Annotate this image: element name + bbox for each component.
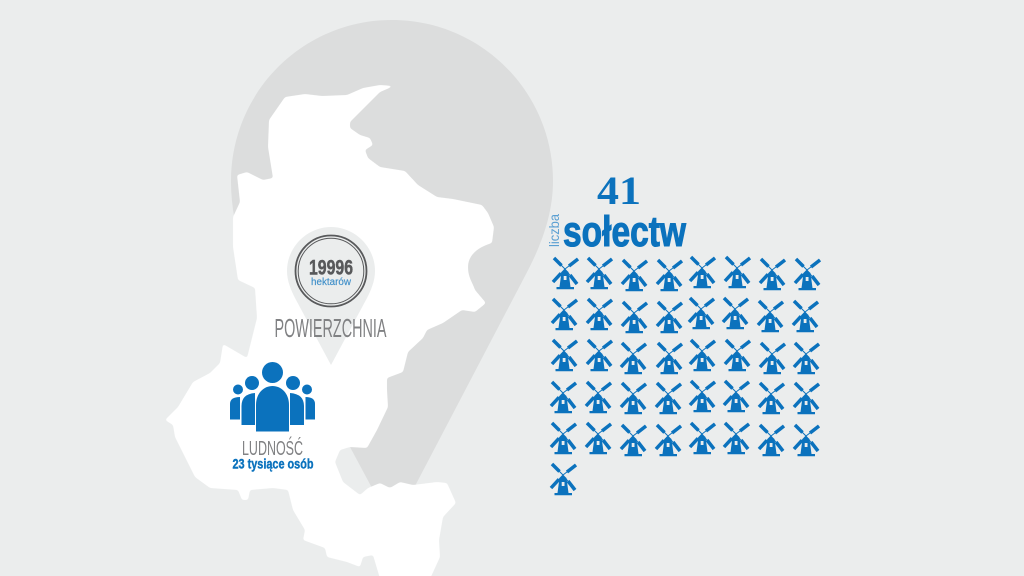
area unit: hektarów [311,277,352,288]
heading: area: POWIERZCHNIA [274,313,387,343]
map of the municipality [165,85,494,576]
icon: group of people [230,362,315,432]
number of villages: 41 [597,168,641,213]
large location pin [231,20,553,488]
heading: population: LUDNOŚĆ [242,436,303,460]
small pin: area [287,227,375,365]
label: liczba: liczba [546,214,562,247]
area value: 19996 [309,256,353,280]
heading: villages: sołectw [563,208,686,256]
windmill icon grid: 41 villages [551,257,820,495]
population value: 23 tysiące osób [232,456,314,472]
ring badge [296,236,366,306]
